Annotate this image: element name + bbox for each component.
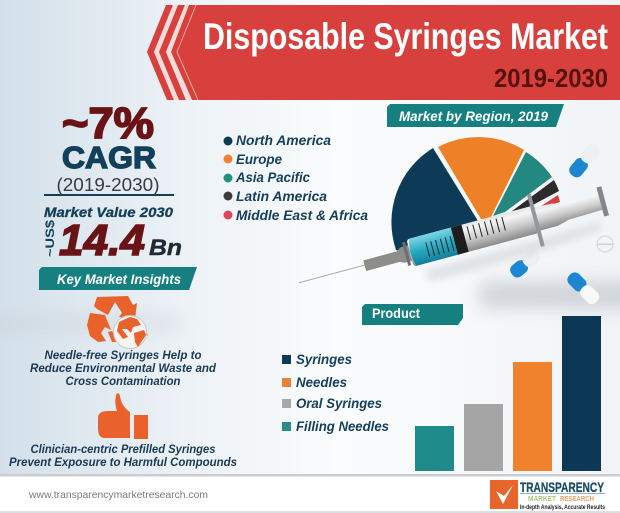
heading: key market insights (39, 267, 197, 290)
legend: Europe: Europe (236, 151, 282, 167)
title banner (147, 5, 620, 100)
icon: thumbs up (98, 393, 148, 439)
product legend (282, 351, 389, 434)
heading: key market insights: Key Market Insights (57, 271, 181, 287)
icon: recycling globe (87, 296, 148, 348)
logo: transparency market research: MARKET (528, 494, 556, 503)
insight text 1 (30, 350, 217, 388)
CAGR period: (2019-2030) (56, 175, 160, 195)
insight text 1: Reduce Environmental Waste and (30, 363, 217, 375)
insight text 1: Cross Contamination (66, 376, 180, 388)
needle hub (363, 245, 412, 273)
icon: capsule lower middle (508, 247, 543, 280)
icon: capsule top right (567, 142, 602, 180)
barrel (406, 206, 539, 267)
icon: syringe (292, 176, 612, 310)
legend: North America: North America (236, 132, 331, 148)
insight text 1: Needle-free Syringes Help to (44, 350, 202, 362)
insight text 2: Prevent Exposure to Harmful Compounds (9, 457, 237, 469)
legend: Filling Needles: Filling Needles (296, 418, 389, 434)
logo: transparency market research: In-depth Analysis, Accurate Results (520, 505, 606, 511)
CAGR label: CAGR (62, 140, 156, 175)
plunger rod (532, 190, 603, 231)
years text: 2019-2030 (494, 63, 608, 93)
bar: needles (513, 362, 552, 471)
CAGR percentage: ~7% (62, 99, 154, 148)
legend: Middle East & Africa: Middle East & Africa (236, 207, 368, 223)
bar: oral syringes (464, 404, 503, 471)
logo: transparency market research: RESEARCH (560, 494, 594, 503)
icon: pill (597, 236, 613, 252)
needle (299, 265, 365, 283)
graduation marks (425, 217, 507, 257)
legend: Syringes: Syringes (296, 351, 352, 367)
rubber stopper (451, 225, 469, 255)
legend: Needles: Needles (296, 374, 347, 390)
footer (0, 474, 620, 513)
bar: filling needles (415, 426, 454, 471)
heading: market by region: Market by Region, 2019 (399, 108, 548, 124)
heading: product: Product (372, 305, 420, 321)
insight text 2 (9, 444, 237, 469)
legend: Oral Syringes: Oral Syringes (296, 395, 382, 411)
fluid (407, 227, 460, 266)
pie chart (391, 137, 560, 256)
website url: www.transparencymarketresearch.com (28, 489, 208, 501)
heading: product (362, 304, 463, 325)
plunger end (596, 186, 609, 217)
logo: transparency market research (490, 479, 606, 511)
bar chart (415, 316, 601, 471)
bar: syringes (562, 316, 601, 471)
legend: Asia Pacific: Asia Pacific (235, 169, 310, 185)
unit: Bn (149, 235, 182, 260)
insight text 2: Clinician-centric Prefilled Syringes (30, 444, 216, 456)
CAGR block (43, 99, 182, 265)
heading: market by region (387, 104, 564, 127)
region legend (224, 132, 368, 223)
syringe shadow (425, 222, 600, 282)
legend: Latin America: Latin America (236, 188, 327, 204)
barrel flange (527, 194, 545, 247)
market value: 14.4 (59, 216, 145, 265)
currency label: ~US$ (43, 220, 57, 257)
market value label: Market Value 2030 (44, 205, 174, 220)
icon: capsule bottom right (565, 270, 602, 307)
